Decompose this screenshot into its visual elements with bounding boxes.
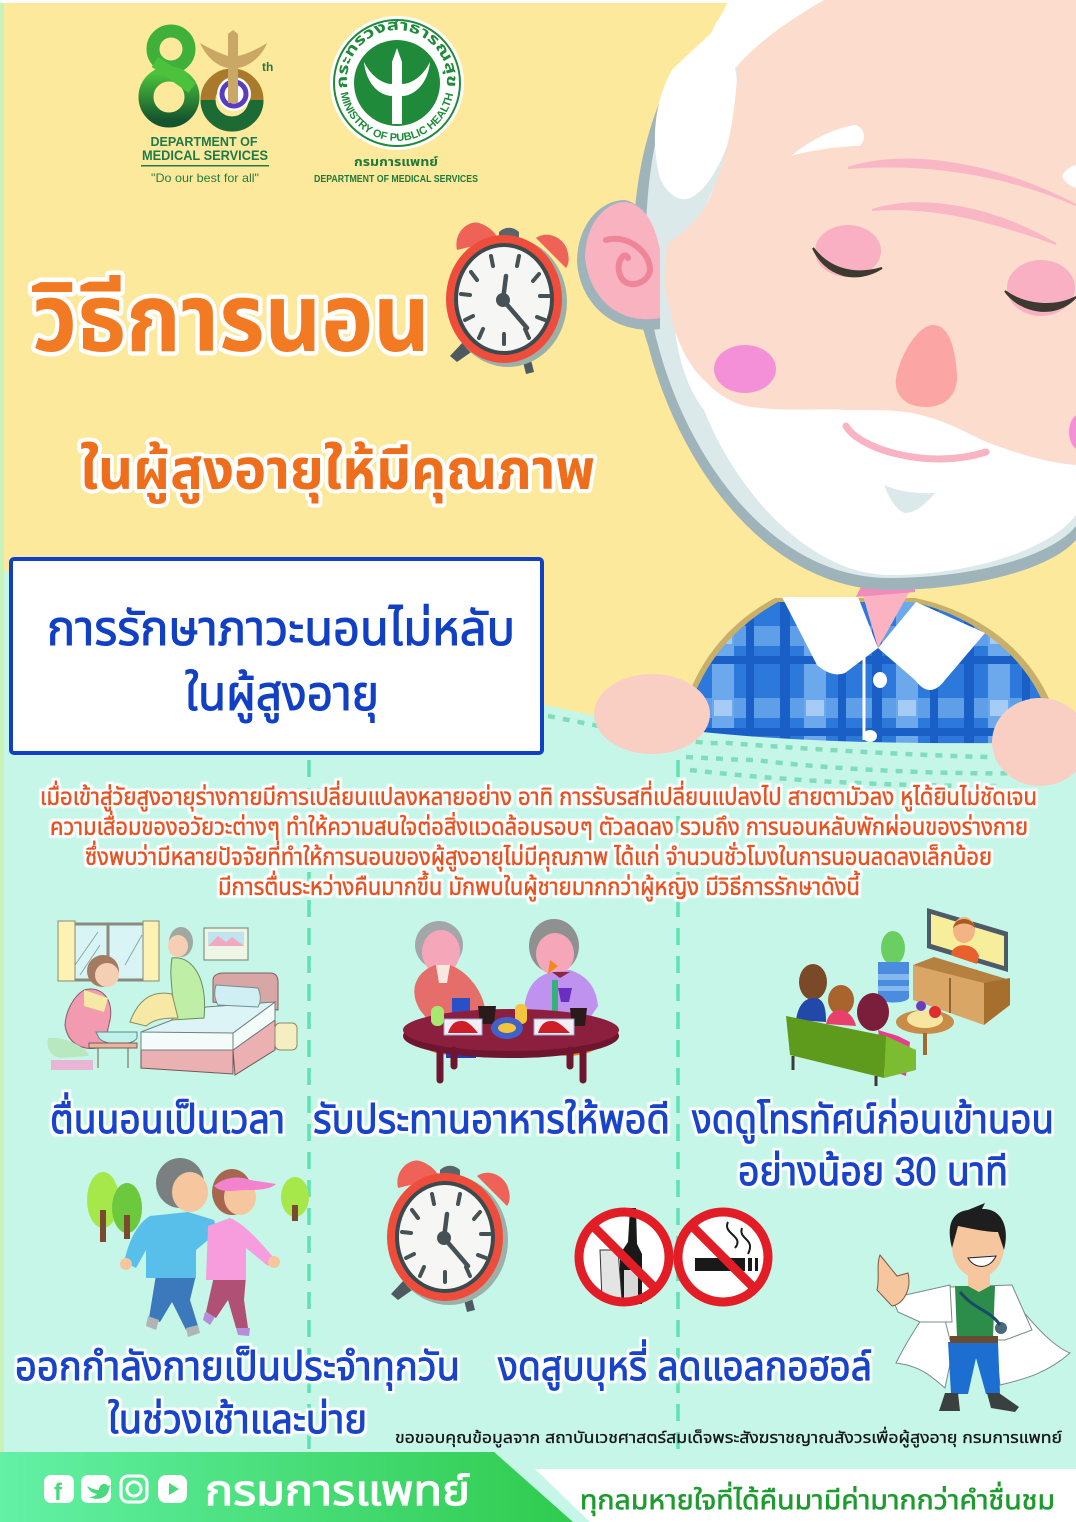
illustration: sleeping grandfather — [577, 0, 1076, 745]
footer band: department: กรมการแพทย์ — [205, 1467, 470, 1514]
left edge strip — [0, 0, 4, 1522]
illustration: elders eating at table — [403, 919, 619, 1080]
label: morning and afternoon: ในช่วงเช้าและบ่าย — [108, 1398, 367, 1442]
column dashed dividers — [309, 760, 678, 1455]
intro paragraph — [40, 780, 1037, 902]
icon: no smoking — [674, 1208, 772, 1306]
logo: ministry of public health seal: DEPARTMENT OF MEDICAL SERVICES — [314, 174, 478, 185]
label: at least 30 minutes: อย่างน้อย 30 นาที — [738, 1150, 1008, 1194]
label: no smoking reduce alcohol: งดสูบบุหรี่ ลดแอลกอฮอล์ — [498, 1339, 872, 1390]
heading line 2: ในผู้สูงอายุ — [185, 668, 379, 723]
intro paragraph: มีการตื่นระหว่างคืนมากขึ้น มักพบในผู้ชายมากกว่าผู้หญิง มีวิธีการรักษาดังนี้ — [218, 870, 860, 902]
footer band: slogan: ทุกลมหายใจที่ได้คืนมามีค่ามากกว่าคำชื่นชม — [580, 1481, 1055, 1516]
intro paragraph: ซึ่งพบว่ามีหลายปัจจัยที่ทำให้การนอนของผู้สูงอายุไม่มีคุณภาพ ได้แก่ จำนวนชั่วโมงในการนอนลดลงเล็กน้อย — [85, 840, 992, 872]
face skin — [665, 0, 1076, 465]
logo: ministry of public health seal: กรมการแพทย์ — [354, 155, 438, 169]
footer band: slogan — [535, 1469, 1076, 1522]
shirt — [678, 576, 1062, 745]
chin shadow — [884, 485, 935, 513]
hands and stitched pocket — [545, 674, 1076, 790]
eyebrows and wrinkles — [791, 125, 1076, 244]
subtitle: ในผู้สูงอายุให้มีคุณภาพ — [80, 438, 595, 504]
title: วิธีการนอน — [32, 266, 430, 371]
label: no television before bed: งดดูโทรทัศน์ก่อนเข้านอน — [692, 1098, 1054, 1143]
head and beard — [633, 0, 1076, 590]
mouth — [846, 426, 986, 459]
nose — [896, 325, 957, 407]
illustration: doctor character — [877, 1203, 1070, 1412]
label: wake on time: ตื่นนอนเป็นเวลา — [50, 1092, 285, 1142]
social icons — [44, 1475, 187, 1506]
logo: ministry of public health seal: MINISTRY OF PUBLIC HEALTH — [340, 92, 454, 141]
illustration: family watching television — [786, 908, 1010, 1086]
logo: ministry of public health seal: กระทรวงสาธารณสุข — [338, 21, 456, 88]
top edge strip — [0, 0, 1076, 3]
icon: no alcohol — [575, 1208, 673, 1306]
closed eyes — [813, 225, 1076, 316]
illustration: caring for feet by the bed — [48, 921, 297, 1075]
illustration: elderly couple jogging — [87, 1158, 309, 1337]
credit line: ขอขอบคุณข้อมูลจาก สถาบันเวชศาสตร์สมเด็จพระสังฆราชญาณสังวรเพื่อผู้สูงอายุ กรมการแพทย์ — [395, 1426, 1062, 1447]
logo: ministry of public health seal — [314, 16, 478, 185]
social icons: f — [54, 1479, 63, 1506]
cheeks — [714, 345, 1076, 450]
label: eat moderately: รับประทานอาหารให้พอดี — [313, 1098, 670, 1142]
illustration: alarm clock — [387, 1161, 510, 1312]
logo: 80th department of medical services — [141, 30, 273, 185]
panel: heading box — [11, 559, 542, 753]
logo: 80th department of medical services: MEDICAL SERVICES — [142, 148, 268, 163]
hair — [655, 0, 824, 199]
title clock icon — [446, 223, 569, 374]
mint lower background — [0, 570, 1076, 1522]
logo: 80th department of medical services: th — [262, 60, 273, 74]
logo: 80th department of medical services: DEPARTMENT OF — [150, 134, 258, 149]
ear — [577, 200, 660, 330]
label: exercise daily: ออกกำลังกายเป็นประจำทุกวัน — [15, 1345, 460, 1390]
logo: 80th department of medical services: "Do our best for all" — [151, 171, 259, 185]
heading line 1: การรักษาภาวะนอนไม่หลับ — [47, 603, 515, 656]
footer band: department — [0, 1452, 573, 1522]
